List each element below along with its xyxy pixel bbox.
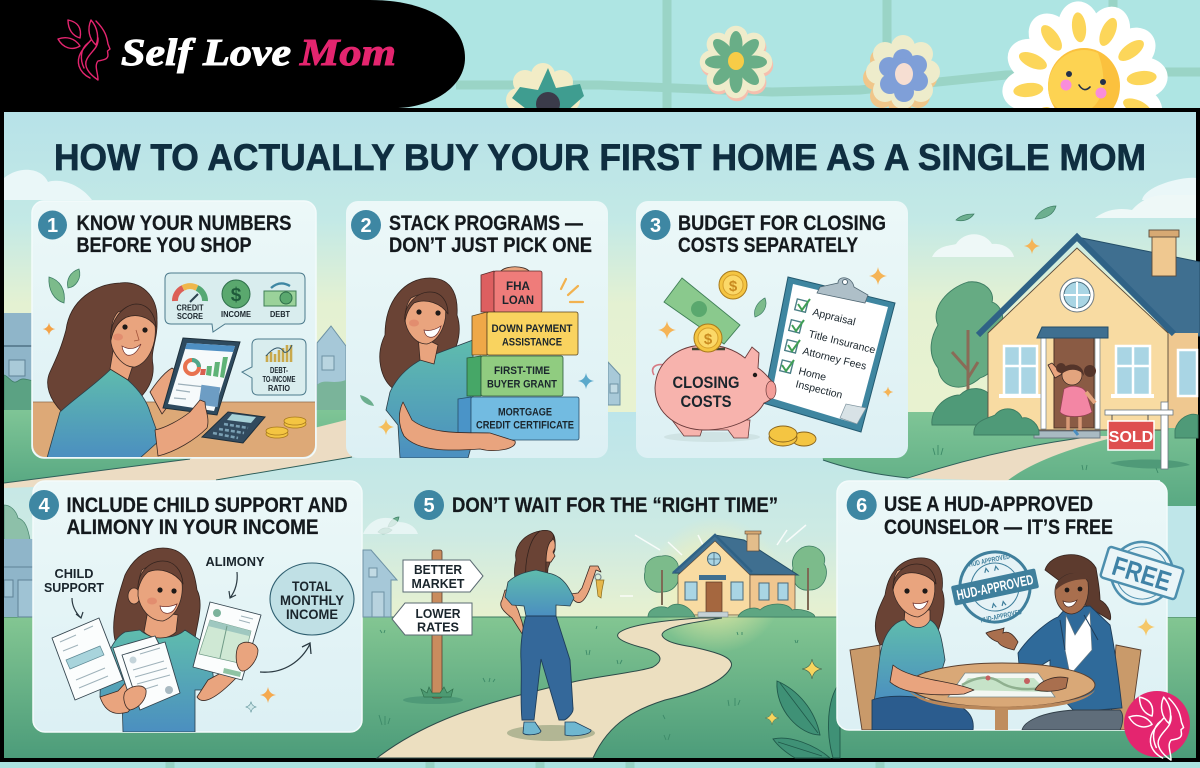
callout: total monthly income: INCOME xyxy=(286,607,338,622)
title: HOW TO ACTUALLY BUY YOUR FIRST HOME AS A SINGLE MOM xyxy=(54,137,1146,178)
floating leaf pair xyxy=(956,206,1056,221)
tablet xyxy=(163,338,240,415)
sign: better market: BETTER xyxy=(414,562,463,577)
heading 6: USE A HUD-APPROVED xyxy=(884,493,1093,516)
block: first-time buyer grant: BUYER GRANT xyxy=(487,378,557,390)
checklist items: Home xyxy=(797,365,828,384)
arrow to total xyxy=(260,643,311,672)
hero house with child and sold sign xyxy=(931,195,1200,473)
step badge 3 xyxy=(640,210,670,240)
credit gauge xyxy=(175,286,205,302)
heading 4 xyxy=(66,494,348,539)
stacked coins xyxy=(769,426,816,446)
sparkles xyxy=(246,687,276,712)
windows xyxy=(1004,346,1197,396)
heading 4: INCLUDE CHILD SUPPORT AND xyxy=(66,494,348,517)
callout: debt to income ratio: TO-INCOME xyxy=(262,375,296,384)
cream path left xyxy=(4,420,353,488)
callout: total monthly income xyxy=(270,563,354,635)
coins xyxy=(266,417,306,438)
heading 1: BEFORE YOU SHOP xyxy=(76,234,252,257)
block: mortgage credit certificate: MORTGAGE xyxy=(498,406,552,418)
woman with keys seen from behind xyxy=(501,530,604,741)
step badge 5: 5 xyxy=(423,495,435,517)
callout: debt to income ratio: DEBT- xyxy=(270,366,288,375)
document left xyxy=(52,618,123,700)
checklist items: Inspection xyxy=(794,378,844,402)
background houses row one xyxy=(4,313,620,411)
stamp: hud approved: HUD APPROVED xyxy=(968,553,1011,569)
sign: better market xyxy=(403,560,483,592)
falling coins: $ xyxy=(729,278,738,295)
falling coins xyxy=(719,271,747,299)
rays xyxy=(620,525,806,596)
panel 3: closing costs xyxy=(636,201,908,458)
heading 6 xyxy=(884,493,1113,539)
logo wordmark: Self Love xyxy=(121,32,291,74)
heading 3 xyxy=(678,212,886,257)
cash bill xyxy=(664,278,740,344)
sparkles and leaf xyxy=(658,267,893,397)
decorative flower: blue xyxy=(863,35,940,115)
checklist items xyxy=(780,299,877,402)
front bush xyxy=(974,409,1039,435)
stamp: hud approved xyxy=(946,544,1044,630)
step badge 1: 1 xyxy=(47,215,58,237)
step badge 6: 6 xyxy=(856,495,867,517)
front roof edges xyxy=(978,237,1174,335)
step badge 1 xyxy=(38,210,67,240)
stamp: free xyxy=(1096,532,1188,614)
step badge 3: 3 xyxy=(650,215,661,237)
coin entering slot: $ xyxy=(704,331,713,348)
callout: debt to income ratio: RATIO xyxy=(268,384,290,393)
grass tufts xyxy=(933,445,1158,473)
background cottage xyxy=(363,550,397,617)
leaves and spark xyxy=(43,269,80,335)
logo wordmark: Mom xyxy=(299,32,396,74)
heading 1: KNOW YOUR NUMBERS xyxy=(76,212,292,235)
block: first-time buyer grant: FIRST-TIME xyxy=(494,365,550,377)
clouds xyxy=(363,518,418,534)
client woman xyxy=(875,558,944,645)
block: FHA loan: LOAN xyxy=(502,293,534,307)
heading 4: ALIMONY IN YOUR INCOME xyxy=(66,516,318,539)
decorative flower: teal xyxy=(506,63,584,108)
round window xyxy=(1060,278,1094,312)
tree xyxy=(931,282,1003,396)
signpost xyxy=(392,550,483,704)
callout: credit income debt: DEBT xyxy=(270,310,290,319)
label: child support: CHILD xyxy=(54,566,94,581)
sold sign xyxy=(1105,402,1190,469)
left top grass xyxy=(4,410,346,483)
block: mortgage credit certificate: CREDIT CERTIFICATE xyxy=(476,420,574,432)
door and porch xyxy=(1034,327,1108,438)
keys xyxy=(595,574,604,598)
trees xyxy=(644,546,826,610)
debt cash xyxy=(264,283,296,306)
callout: total monthly income: MONTHLY xyxy=(280,593,344,608)
logo wordmark xyxy=(121,32,396,74)
child waving xyxy=(1048,363,1096,435)
sparkle xyxy=(1137,618,1155,636)
documents centre xyxy=(113,636,180,710)
coin entering slot xyxy=(694,324,722,352)
block: mortgage credit certificate xyxy=(458,397,579,440)
bushes xyxy=(932,389,990,425)
chimney xyxy=(1149,230,1179,276)
front wall xyxy=(988,248,1168,430)
heading 3: BUDGET FOR CLOSING xyxy=(678,212,886,235)
heading 1 xyxy=(76,212,292,257)
bottom strip xyxy=(0,762,1200,768)
block: down payment assistance: DOWN PAYMENT xyxy=(492,323,573,335)
panel 5: don't wait for the right time xyxy=(363,490,840,758)
winding path xyxy=(377,618,732,758)
sky glow xyxy=(648,517,784,653)
left house row two xyxy=(4,505,34,617)
callout: total monthly income: TOTAL xyxy=(292,579,332,594)
map xyxy=(948,673,1055,697)
heading 5: DON’T WAIT FOR THE “RIGHT TIME” xyxy=(452,494,778,517)
heading 2: DON’T JUST PICK ONE xyxy=(389,234,592,257)
cloud right xyxy=(1142,178,1196,200)
callout: credit income debt: SCORE xyxy=(177,312,204,321)
arm and hand on map xyxy=(890,665,974,695)
label: alimony: ALIMONY xyxy=(206,554,265,569)
block: first-time buyer grant xyxy=(467,356,563,396)
block: down payment assistance: ASSISTANCE xyxy=(502,336,562,348)
right side backdrop xyxy=(1167,506,1196,617)
illustration: desk and woman with tablet xyxy=(33,283,315,458)
step badge 6 xyxy=(847,490,877,520)
counselor woman xyxy=(1045,555,1111,620)
income coin: $ xyxy=(231,285,242,306)
sign: lower rates: RATES xyxy=(417,620,459,634)
brand logo banner xyxy=(0,0,465,108)
label: alimony xyxy=(206,554,265,598)
top banner background xyxy=(0,0,1200,108)
logo mark xyxy=(58,20,110,80)
carrying arm xyxy=(399,402,515,451)
stamp: free: FREE xyxy=(1109,551,1175,597)
cloud left xyxy=(4,170,92,200)
step badge 4 xyxy=(29,490,59,520)
clipboard checklist xyxy=(763,277,895,432)
step badge 2: 2 xyxy=(360,215,372,237)
illustration: woman carrying blocks xyxy=(380,278,473,458)
checklist items: Appraisal xyxy=(811,306,857,329)
piggy bank: CLOSING xyxy=(672,373,740,392)
block: down payment assistance xyxy=(472,312,578,355)
side wall xyxy=(1168,333,1198,428)
panel 1: know your numbers xyxy=(32,201,316,458)
sign: better market: MARKET xyxy=(412,576,465,591)
decorative smiling sun flower xyxy=(1002,1,1168,108)
cream path hero xyxy=(908,436,1120,481)
label: child support: SUPPORT xyxy=(44,580,104,595)
heading 3: COSTS SEPARATELY xyxy=(678,234,858,257)
grass hill under hero house xyxy=(815,412,1196,506)
brand badge bottom right xyxy=(1124,691,1190,760)
stamp: hud approved: HUD-APPROVED xyxy=(955,571,1035,603)
illustration: counseling scene xyxy=(850,555,1141,732)
sold sign: SOLD xyxy=(1109,429,1153,446)
panel 6: hud counselor xyxy=(837,481,1188,732)
gesturing hand xyxy=(986,628,1018,650)
cloud upper right xyxy=(1095,195,1196,218)
heading 2 xyxy=(389,212,592,257)
checklist items: Attorney Fees xyxy=(801,345,868,373)
leaf xyxy=(378,517,399,534)
cloud xyxy=(932,234,1014,257)
sign: lower rates: LOWER xyxy=(416,606,461,621)
callout: credit income debt: INCOME xyxy=(221,310,252,319)
step badge 5 xyxy=(414,490,444,520)
piggy bank xyxy=(653,345,776,442)
document right xyxy=(193,602,261,680)
block: FHA loan: FHA xyxy=(506,279,530,293)
label: child support xyxy=(44,566,104,618)
chairs xyxy=(850,645,880,730)
step badge 2 xyxy=(351,210,381,240)
foreground leaves and sparkles xyxy=(379,626,840,758)
illustration: woman with documents xyxy=(100,548,252,732)
sign: lower rates xyxy=(392,603,472,635)
sparkles and accents xyxy=(360,279,594,435)
calculator xyxy=(202,412,265,443)
panel 4: child support and alimony xyxy=(29,481,362,732)
stamp: hud approved: HUD-APPROVED xyxy=(980,609,1023,625)
piggy bank: COSTS xyxy=(680,392,732,411)
side roof xyxy=(1077,237,1200,336)
callout: credit income debt: CREDIT xyxy=(176,304,204,312)
heading 6: COUNSELOR — IT’S FREE xyxy=(884,516,1113,539)
heading 2: STACK PROGRAMS — xyxy=(389,212,583,235)
step badge 4: 4 xyxy=(38,495,50,517)
checklist items: Title Insurance xyxy=(807,328,877,357)
block: FHA loan xyxy=(481,267,542,312)
small house in the distance xyxy=(644,531,826,617)
bottom grass xyxy=(4,617,1196,758)
callout: credit income debt xyxy=(165,273,305,332)
decorative flower: green xyxy=(700,26,773,101)
table xyxy=(909,663,1095,707)
panel 2: stack programs xyxy=(346,201,608,458)
callout: debt to income ratio xyxy=(242,339,306,395)
